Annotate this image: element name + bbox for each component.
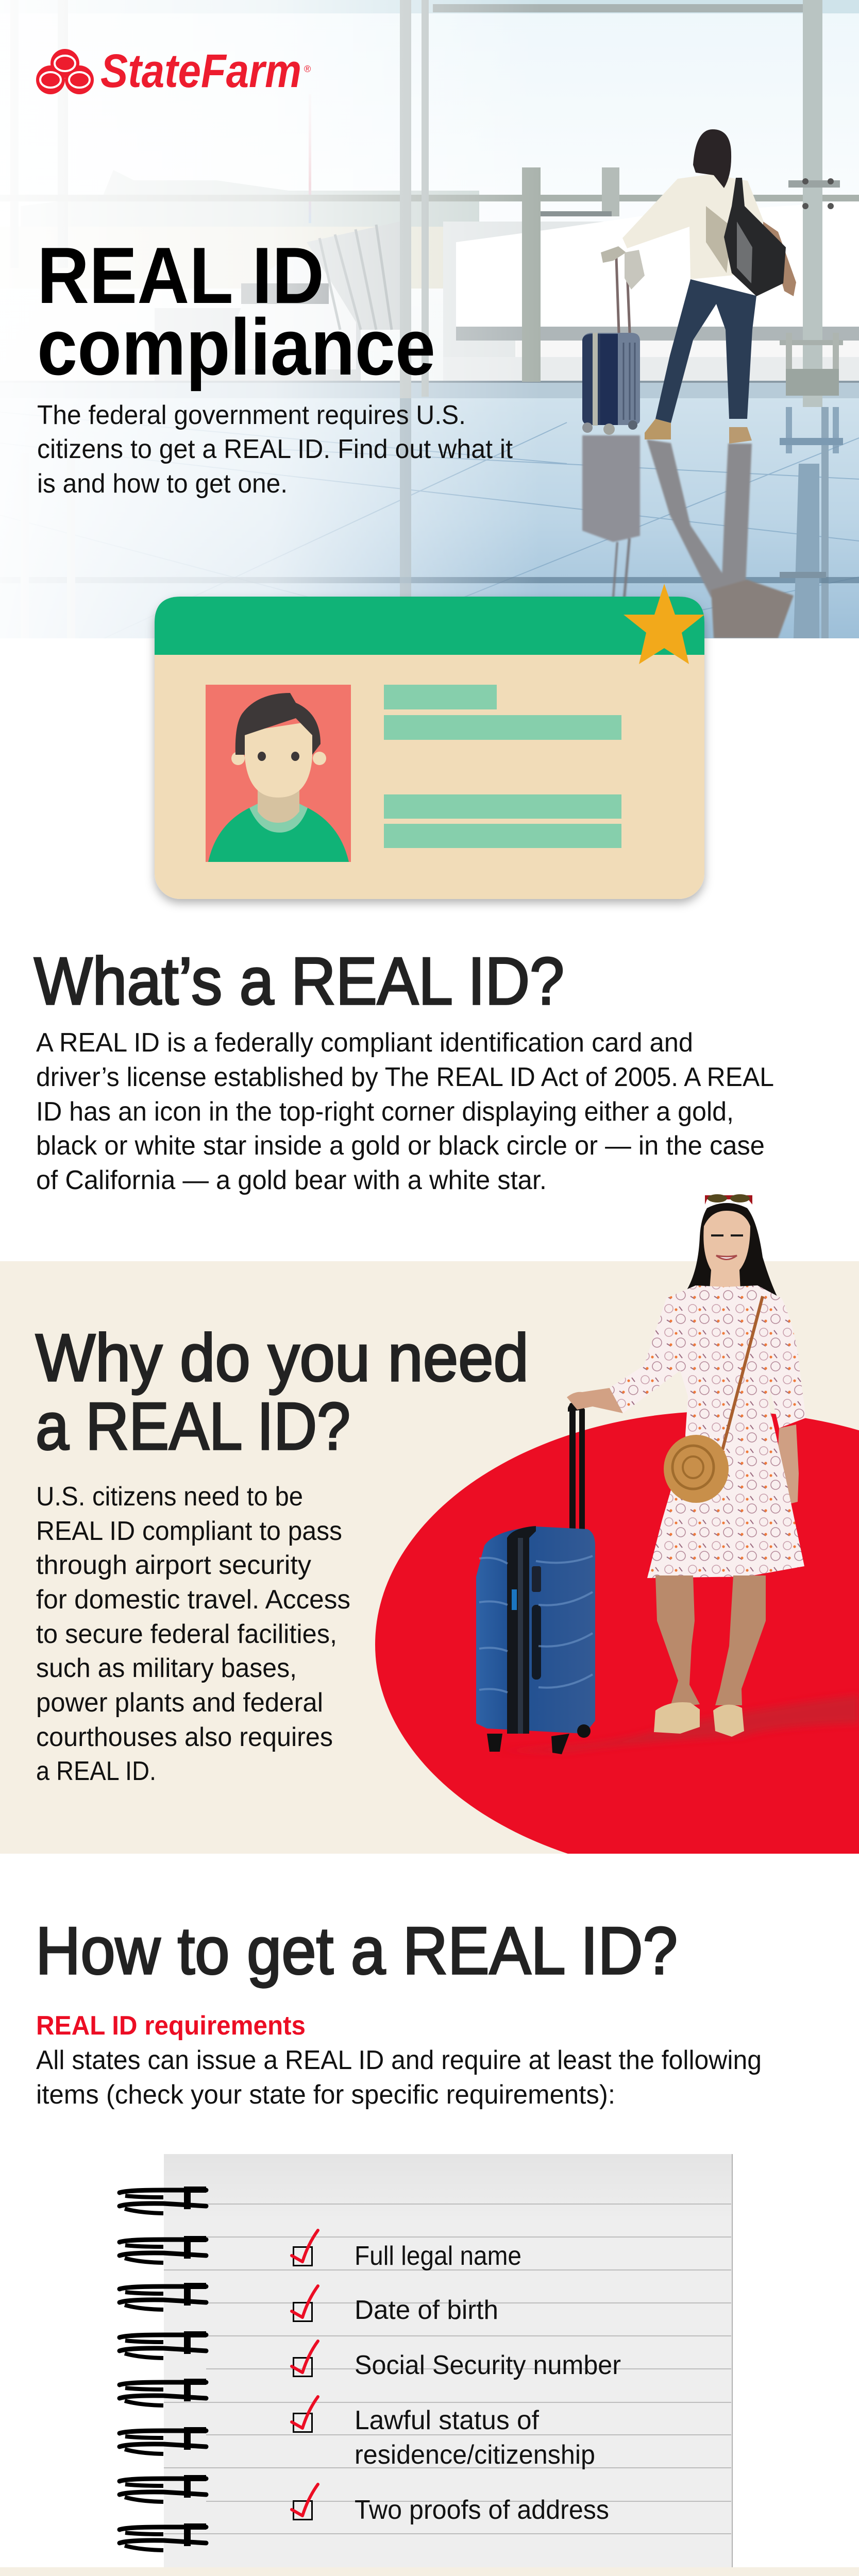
beige panel xyxy=(0,2567,859,2576)
hero intro text: citizens to get a REAL ID. Find out what it xyxy=(37,434,513,464)
arm right xyxy=(763,222,796,296)
intro text: items (check your state for specific requirements): xyxy=(36,2080,615,2110)
body text: REAL ID compliant to pass xyxy=(36,1516,342,1546)
ground shadow xyxy=(495,1695,859,1752)
body text: of California — a gold bear with a white star. xyxy=(36,1165,547,1195)
checklist item: full legal name xyxy=(292,2230,521,2271)
body text: courthouses also requires xyxy=(36,1722,333,1752)
hero heading: REAL ID xyxy=(37,231,324,320)
legs xyxy=(655,279,756,423)
body text: for domestic travel. Access xyxy=(36,1585,350,1615)
scarf xyxy=(601,246,626,263)
checklist item: lawful status: residence/citizenship xyxy=(355,2440,595,2470)
hero traveler reflection xyxy=(582,435,794,638)
dress xyxy=(610,1285,806,1578)
body text xyxy=(36,1482,350,1786)
face xyxy=(703,1211,750,1296)
hero intro text: The federal government requires U.S. xyxy=(37,400,466,430)
ID card illustration xyxy=(155,584,704,899)
body text xyxy=(36,1028,774,1195)
checklist item: two proofs of address: Two proofs of address xyxy=(355,2495,609,2525)
hero heading xyxy=(37,231,435,392)
State Farm logo: ® xyxy=(304,64,311,74)
heading: How to get a REAL ID? xyxy=(36,1913,678,1988)
notebook checklist xyxy=(120,2154,733,2567)
beige panel xyxy=(0,1261,859,1854)
crossbody strap xyxy=(722,1296,763,1450)
body text: such as military bases, xyxy=(36,1653,297,1683)
suitcase xyxy=(616,258,630,333)
ID portrait xyxy=(206,685,351,862)
icon: gold star xyxy=(624,584,704,664)
hero traveler xyxy=(582,129,796,444)
right forearm and hand xyxy=(776,1425,799,1505)
woven bag xyxy=(664,1435,729,1503)
intro text xyxy=(36,2045,762,2110)
body text: ID has an icon in the top-right corner displaying either a gold, xyxy=(36,1097,734,1127)
sunglasses xyxy=(705,1194,752,1205)
blue suitcase xyxy=(476,1402,595,1754)
requirements subheading: REAL ID requirements xyxy=(36,2011,306,2041)
heading: What’s a REAL ID? xyxy=(34,943,564,1019)
icon: three ovals xyxy=(36,49,94,94)
checklist item: date of birth: Date of birth xyxy=(355,2295,498,2325)
heading: a REAL ID? xyxy=(36,1388,350,1464)
hero intro text xyxy=(37,400,513,499)
body text: driver’s license established by The REAL ID Act of 2005. A REAL xyxy=(36,1062,774,1092)
hero intro text: is and how to get one. xyxy=(37,469,288,499)
body text: U.S. citizens need to be xyxy=(36,1482,303,1512)
checklist item: social security number xyxy=(292,2341,621,2380)
jet bridge xyxy=(443,222,603,357)
woman with floral dress xyxy=(567,1194,806,1737)
stand xyxy=(780,340,843,345)
legs xyxy=(655,1575,700,1708)
hero airport photo background xyxy=(0,0,859,639)
section: how to get a REAL ID xyxy=(36,1913,762,2567)
hair xyxy=(693,129,731,188)
heading: Why do you need xyxy=(36,1320,529,1395)
intro text: All states can issue a REAL ID and require at least the following xyxy=(36,2045,762,2075)
checklist item: full legal name: Full legal name xyxy=(355,2241,521,2271)
notebook page xyxy=(164,2154,733,2567)
hair xyxy=(685,1203,778,1298)
left arm and hand xyxy=(567,1388,623,1413)
checklist item: two proofs of address xyxy=(292,2484,609,2525)
spiral binding xyxy=(120,2187,206,2550)
section: why do you need a REAL ID xyxy=(0,1194,859,1878)
body text: to secure federal facilities, xyxy=(36,1619,337,1649)
body text: a REAL ID. xyxy=(36,1756,156,1786)
bag xyxy=(724,178,786,296)
red ellipse xyxy=(375,1411,859,1878)
body text: power plants and federal xyxy=(36,1688,323,1718)
card body xyxy=(155,597,704,899)
body text: black or white star inside a gold or black circle or — in the case xyxy=(36,1131,765,1161)
window frame xyxy=(0,195,859,201)
distant terminal xyxy=(154,180,479,227)
checklist item: lawful status xyxy=(292,2397,595,2470)
checklist item: lawful status: Lawful status of xyxy=(355,2405,540,2435)
section: what's a REAL ID xyxy=(34,943,774,1195)
hero panel xyxy=(0,0,859,639)
body text: A REAL ID is a federally compliant identification card and xyxy=(36,1028,693,1058)
sandals xyxy=(654,1702,700,1734)
shirt xyxy=(622,174,764,279)
checklist item: date of birth xyxy=(292,2286,498,2325)
ID data bars xyxy=(384,685,621,848)
hero heading: compliance xyxy=(37,302,435,392)
section: other REAL ID information xyxy=(0,2567,859,2576)
State Farm logo: StateFarm xyxy=(100,45,301,97)
checklist item: social security number: Social Security number xyxy=(355,2350,621,2380)
hero left white fade xyxy=(0,0,541,638)
heading xyxy=(36,1320,529,1464)
card header band xyxy=(155,597,704,655)
body text: through airport security xyxy=(36,1550,311,1580)
